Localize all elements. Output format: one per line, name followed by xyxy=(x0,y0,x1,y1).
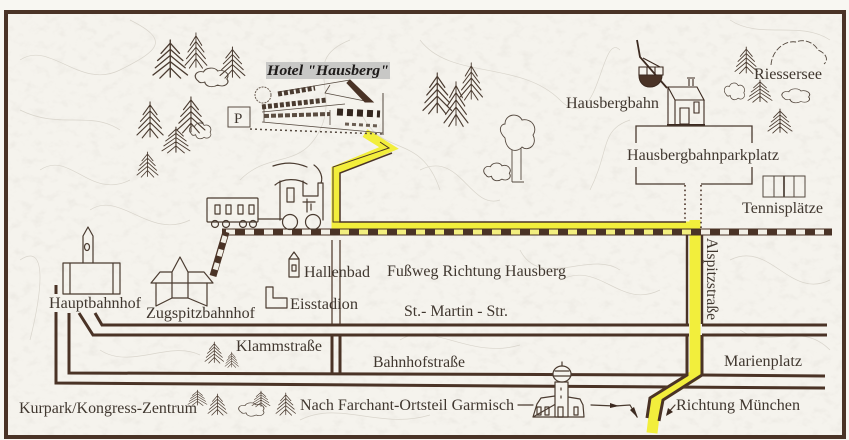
labels: Zugspitzbahnhof xyxy=(146,305,256,322)
labels: Tennisplätze xyxy=(742,200,823,217)
labels: Hauptbahnhof xyxy=(49,295,142,312)
icon: Hallenbad xyxy=(289,252,299,277)
labels: Nach Farchant-Ortsteil Garmisch xyxy=(300,397,514,414)
icon: forest upper right xyxy=(724,41,826,133)
icon: tennis courts xyxy=(763,176,805,197)
icon: parking sign: P xyxy=(234,111,242,127)
arrow: from church to route xyxy=(591,403,638,418)
icon: hotel building xyxy=(250,80,383,135)
labels: Eisstadion xyxy=(290,296,358,313)
labels: Klammstraße xyxy=(236,338,322,355)
icon: Eisstadion xyxy=(266,287,287,308)
labels xyxy=(19,66,823,417)
icon: Hauptbahnhof xyxy=(63,227,120,294)
labels: Fußweg Richtung Hausberg xyxy=(387,263,566,280)
icon: parking sign xyxy=(228,107,250,127)
labels: Hausbergbahnparkplatz xyxy=(627,147,779,164)
arrow: Richtung München xyxy=(666,405,675,416)
icon: trees at Klammstrasse xyxy=(205,342,238,368)
icon: deciduous tree and bushes xyxy=(484,115,535,182)
labels: Bahnhofstraße xyxy=(373,354,465,371)
icon: parking lot outline xyxy=(636,126,752,184)
labels: Alspitzstraße xyxy=(703,238,720,320)
railway branch to Zugspitzbahnhof xyxy=(213,232,226,276)
labels: Kurpark/Kongress-Zentrum xyxy=(19,400,198,417)
railway line xyxy=(222,228,832,236)
icon: Zugspitzbahnhof xyxy=(151,257,213,306)
labels: Riessersee xyxy=(754,66,822,83)
highlighted route to hotel xyxy=(333,133,702,433)
labels: Richtung München xyxy=(676,397,800,414)
labels: Hallenbad xyxy=(304,264,370,281)
roads xyxy=(56,240,827,388)
labels: St.- Martin - Str. xyxy=(404,303,508,320)
icon: forest upper left xyxy=(137,33,245,177)
hotel name: Hotel "Hausberg" xyxy=(266,63,389,79)
footpath dotted lines xyxy=(685,185,701,228)
icon: cable car and station xyxy=(637,40,705,125)
icon: forest centre xyxy=(423,63,482,126)
icon: church xyxy=(533,362,584,417)
arrow: from Garmisch to church xyxy=(518,404,533,406)
icon: steam locomotive and carriage xyxy=(207,163,323,230)
labels: Marienplatz xyxy=(724,353,802,370)
icon: trees at Kurpark xyxy=(188,390,296,416)
labels: Hausbergbahn xyxy=(566,95,659,112)
